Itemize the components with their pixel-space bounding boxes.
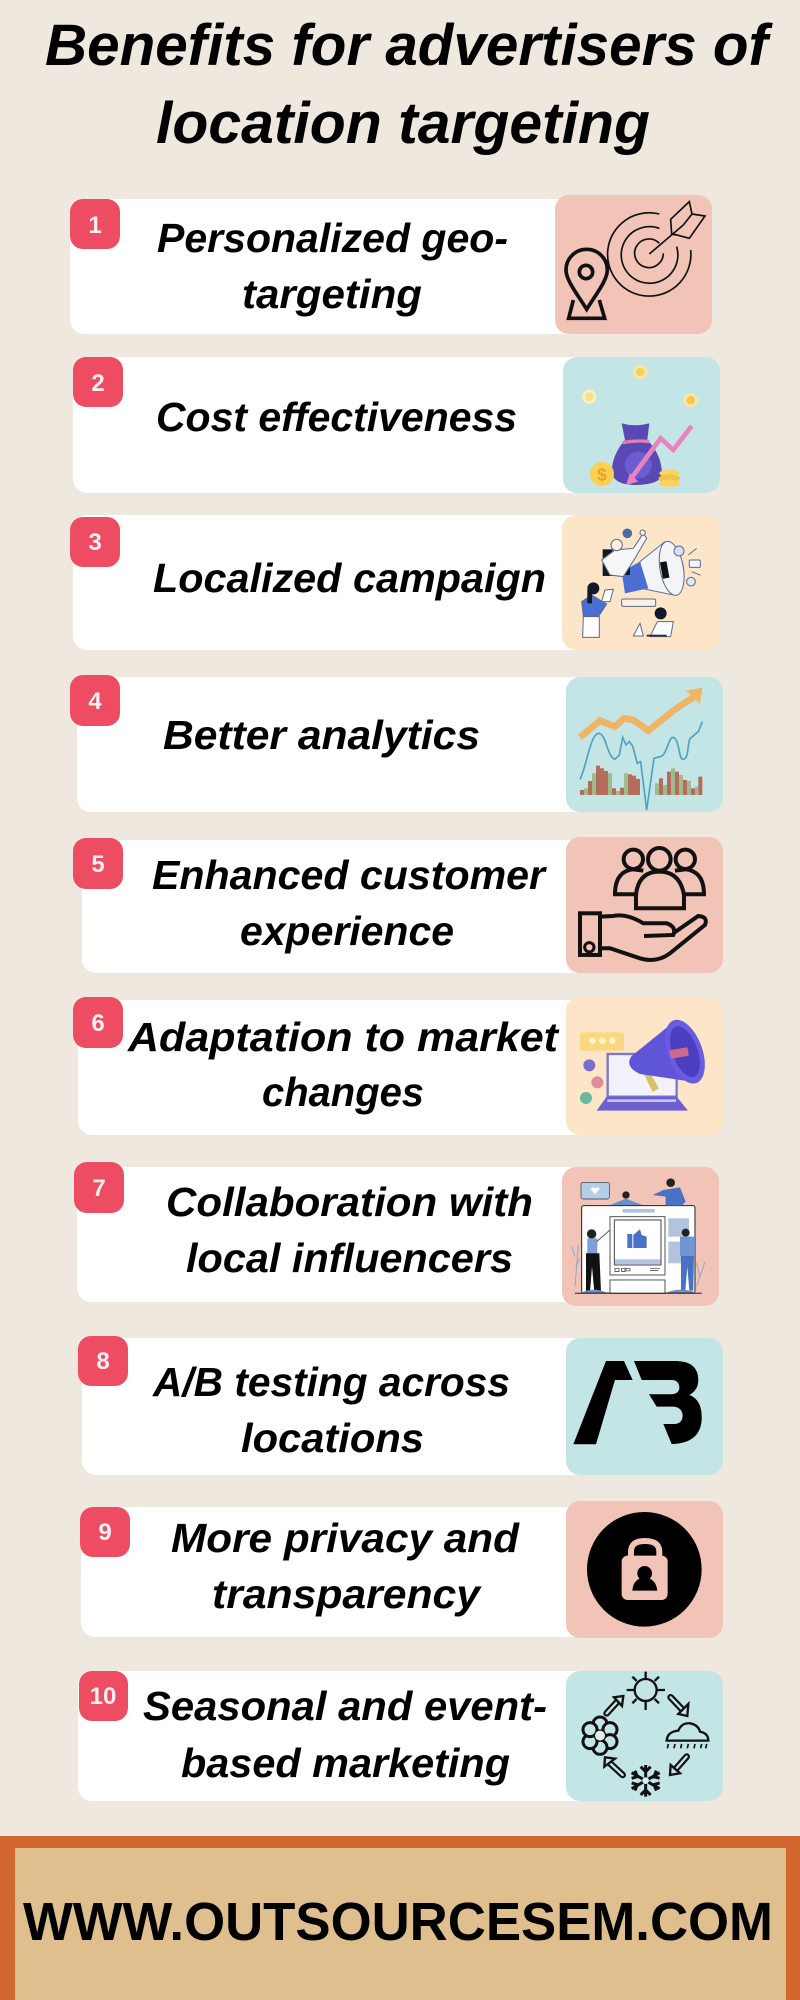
panel: 1 personalized geo-targeting: [70, 195, 712, 334]
icon: analytics chart: [566, 677, 723, 812]
label: [152, 852, 547, 954]
icon: money bag with rising arrow: $: [597, 465, 607, 485]
icon: AB logo: [566, 1338, 723, 1475]
label: [127, 1014, 560, 1115]
label: based marketing: [181, 1740, 510, 1786]
number badge 2: [73, 357, 123, 407]
number badge 6: [73, 997, 123, 1048]
label: targeting: [242, 271, 422, 317]
number badge 7: 7: [92, 1175, 106, 1202]
title: [45, 13, 774, 156]
label: Adaptation to market: [127, 1014, 560, 1060]
panel: 5 enhanced customer experience: [73, 837, 723, 973]
number badge 1: [70, 199, 120, 249]
number badge 4: 4: [88, 688, 102, 715]
card background: [73, 515, 593, 650]
number badge 10: 10: [90, 1683, 116, 1710]
card background: [82, 1338, 597, 1475]
number badge 7: [74, 1162, 124, 1213]
label: transparency: [212, 1571, 482, 1617]
card background: [77, 1167, 587, 1302]
icon: money bag with rising arrow: [563, 357, 720, 493]
label: experience: [240, 908, 454, 954]
label: locations: [241, 1415, 424, 1461]
label: changes: [262, 1069, 424, 1115]
panel: 7 collaboration with local influencers: [74, 1162, 719, 1306]
label: [143, 1683, 547, 1786]
panel: 3 localized campaign: [70, 515, 720, 650]
label: More privacy and: [171, 1515, 520, 1561]
number badge 10: [79, 1671, 128, 1721]
title: Benefits for advertisers of: [45, 13, 774, 78]
card background: [81, 1507, 596, 1637]
label: [171, 1515, 520, 1617]
number badge 9: 9: [98, 1519, 112, 1546]
card background: [78, 1671, 598, 1801]
label: [166, 1179, 533, 1281]
label: A/B testing across: [152, 1359, 510, 1405]
label: Seasonal and event-: [143, 1683, 547, 1729]
number badge 1: 1: [88, 212, 102, 239]
card background: [78, 1000, 598, 1135]
number badge 6: 6: [91, 1010, 105, 1037]
panel: 2 cost effectiveness: [73, 357, 720, 493]
card background: [77, 677, 597, 812]
website address: WWW.OUTSOURCESEM.COM: [23, 1892, 773, 1952]
footer banner: [0, 1836, 800, 2000]
panel: 6 adaptation to market changes: [73, 997, 723, 1135]
label: Collaboration with: [166, 1179, 533, 1225]
panel: 10 seasonal and event-based marketing: [78, 1671, 723, 1801]
label: [157, 215, 508, 317]
label: Localized campaign: [153, 555, 546, 601]
card background: [70, 199, 590, 334]
label: Enhanced customer: [152, 852, 547, 898]
number badge 4: [70, 675, 120, 726]
label: local influencers: [186, 1235, 513, 1281]
icon: padlock: [566, 1501, 723, 1638]
card background: [82, 840, 597, 973]
title: location targeting: [156, 91, 650, 156]
number badge 8: 8: [96, 1348, 110, 1375]
number badge 8: [78, 1336, 128, 1386]
icon: social media post with influencers: [562, 1167, 719, 1306]
panel: 4 better analytics: [70, 675, 723, 812]
number badge 5: [73, 838, 123, 889]
icon: hand holding people: [566, 837, 723, 973]
icon: people with megaphone: [562, 515, 720, 650]
number badge 3: [70, 517, 120, 567]
label: [152, 1359, 510, 1461]
number badge 5: 5: [91, 851, 105, 878]
number badge 2: 2: [91, 370, 105, 397]
icon: laptop with purple megaphone: [566, 997, 723, 1135]
icon: target and map pin: [555, 195, 712, 334]
number badge 9: [80, 1507, 130, 1557]
panel: 9 more privacy and transparency: [80, 1501, 723, 1638]
label: Cost effectiveness: [156, 394, 517, 440]
icon: seasons cycle: [566, 1671, 723, 1801]
number badge 3: 3: [88, 529, 102, 556]
label: Personalized geo-: [157, 215, 508, 261]
card background: [73, 357, 593, 493]
label: Better analytics: [163, 712, 480, 758]
panel: 8 A/B testing across locations: [78, 1336, 723, 1475]
